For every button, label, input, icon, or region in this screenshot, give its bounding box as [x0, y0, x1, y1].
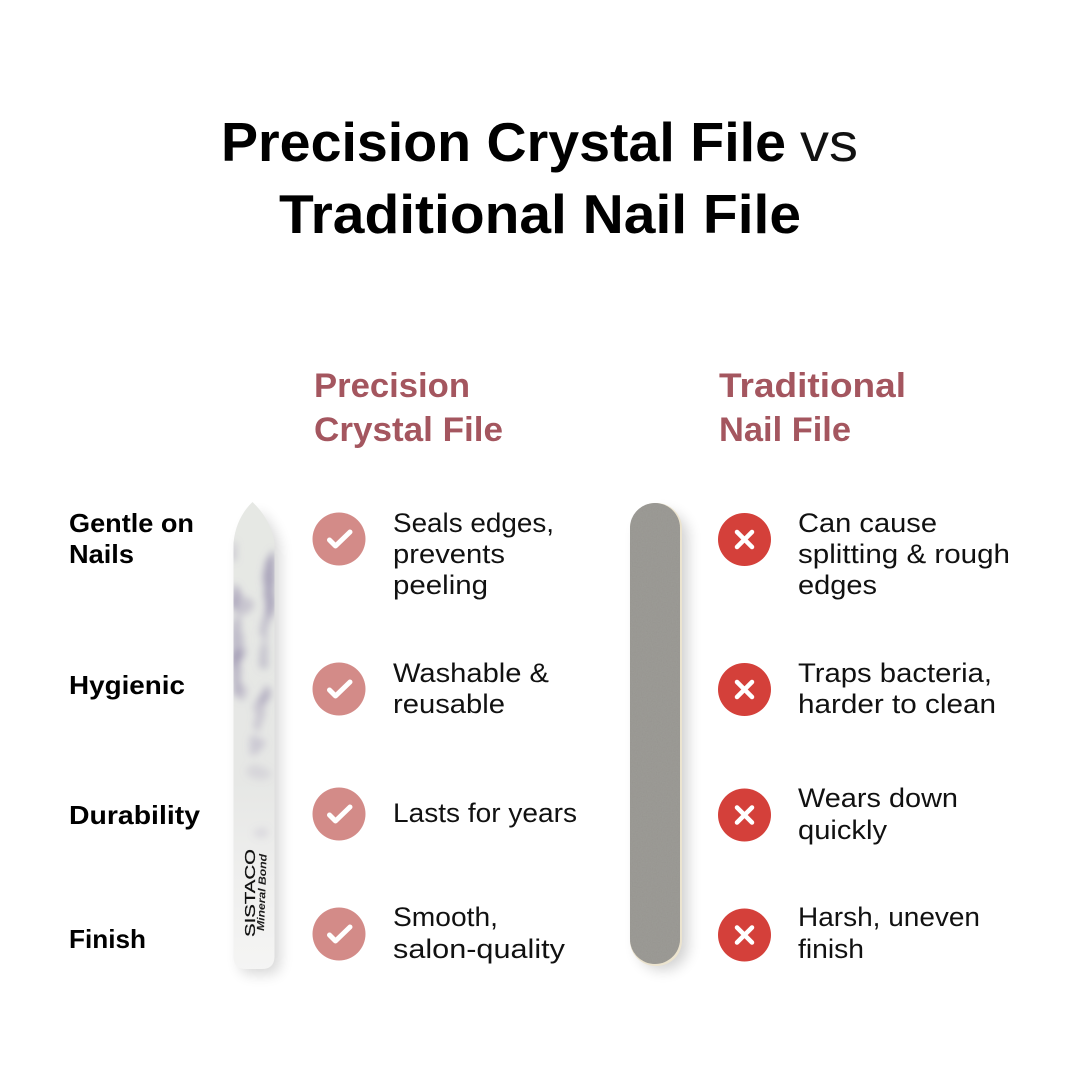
cross icon: durability: [718, 788, 771, 842]
traditional text: durability: quickly: [798, 815, 888, 845]
illustration: crystal file: [230, 498, 280, 974]
crystal text: gentle: [393, 508, 554, 600]
traditional text: hygienic: harder to clean: [798, 689, 996, 719]
crystal text: finish: salon-quality: [393, 934, 566, 964]
crystal text: gentle: Seals edges,: [393, 508, 554, 538]
crystal text: hygienic: [393, 658, 549, 719]
traditional text: gentle: edges: [798, 570, 877, 600]
row label: gentle on nails: Gentle on: [69, 508, 194, 538]
heading: traditional nail file column: Traditional: [719, 367, 906, 405]
brand text on crystal file: Mineral Bond: [255, 853, 270, 931]
illustration: traditional nail file: [630, 503, 688, 970]
crystal text: hygienic: Washable &: [393, 658, 549, 688]
row label: finish: Finish: [69, 924, 146, 954]
row label: gentle on nails: Nails: [69, 539, 134, 569]
heading: precision crystal file column: Precision: [314, 367, 470, 405]
traditional text: hygienic: Traps bacteria,: [798, 658, 992, 688]
row label: gentle on nails: [69, 508, 194, 569]
check icon: hygienic: [312, 662, 366, 716]
cross icon: finish: [718, 908, 771, 962]
traditional text: durability: [798, 783, 958, 845]
traditional text: finish: [798, 902, 980, 964]
row label: hygienic: Hygienic: [69, 670, 185, 700]
traditional text: gentle: splitting & rough: [798, 539, 1010, 569]
brand text on crystal file: SISTACO: [243, 849, 259, 937]
traditional text: finish: finish: [798, 934, 864, 964]
cross icon: hygienic: [718, 663, 771, 716]
crystal text: hygienic: reusable: [393, 689, 505, 719]
cross icon: gentle: [718, 513, 771, 566]
check icon: finish: [312, 908, 366, 960]
check icon: durability: [312, 788, 366, 840]
traditional text: durability: Wears down: [798, 783, 958, 813]
heading: precision crystal file column: [314, 367, 503, 449]
title: Precision Crystal File: [221, 111, 786, 173]
crystal text: gentle: prevents: [393, 539, 505, 569]
heading: traditional nail file column: Nail File: [719, 411, 851, 449]
heading: traditional nail file column: [719, 367, 906, 449]
brand text on crystal file: [243, 849, 270, 937]
title: vs: [800, 113, 858, 173]
row label: durability: Durability: [69, 800, 201, 830]
traditional text: gentle: [798, 508, 1010, 600]
crystal text: gentle: peeling: [393, 570, 488, 600]
title: Traditional Nail File: [279, 183, 801, 245]
traditional text: finish: Harsh, uneven: [798, 902, 980, 932]
traditional text: hygienic: [798, 658, 996, 719]
crystal text: finish: [393, 902, 566, 964]
title: [221, 111, 858, 245]
heading: precision crystal file column: Crystal File: [314, 411, 503, 449]
check icon: gentle: [312, 512, 366, 566]
crystal text: finish: Smooth,: [393, 902, 498, 932]
traditional text: gentle: Can cause: [798, 508, 937, 538]
crystal text: durability: Lasts for years: [393, 798, 577, 828]
